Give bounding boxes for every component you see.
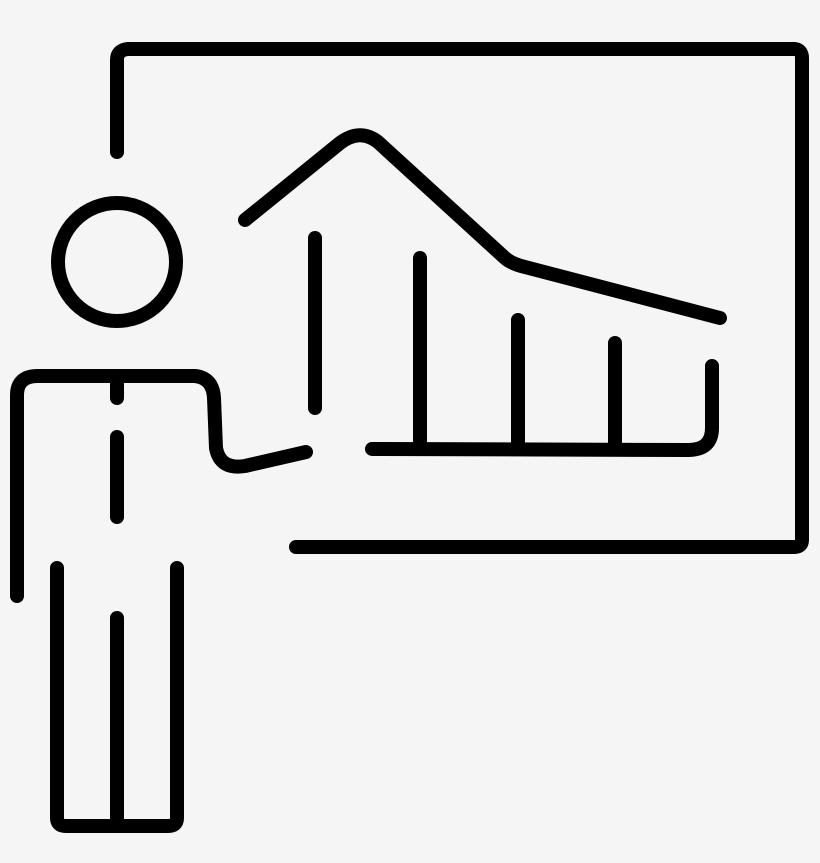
chart: trend line	[245, 135, 720, 318]
person: legs	[57, 568, 177, 826]
person: body and pointing arm	[17, 376, 306, 596]
chart: bars	[315, 238, 712, 450]
person: head	[58, 203, 176, 321]
presentation board	[117, 49, 802, 547]
